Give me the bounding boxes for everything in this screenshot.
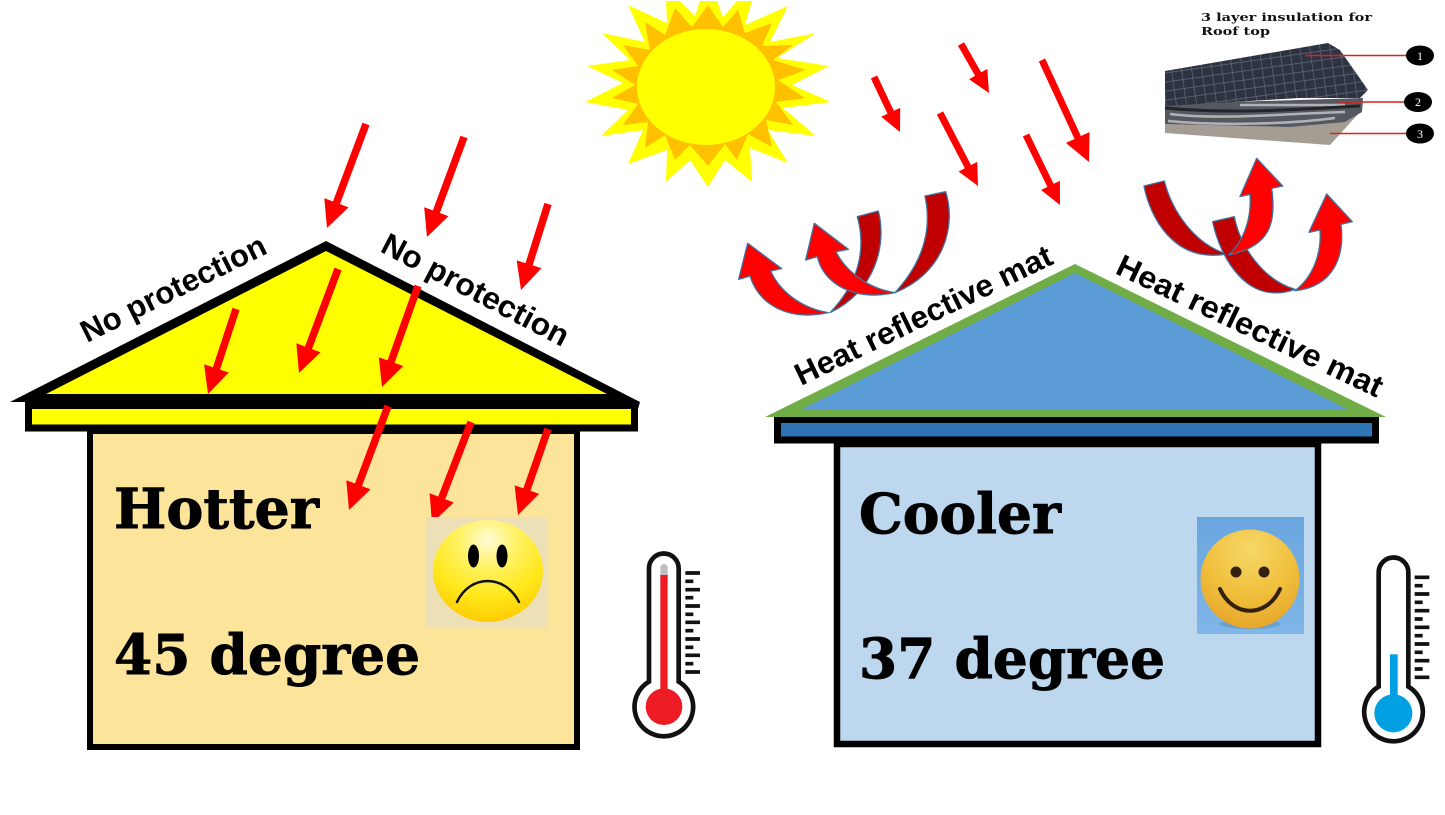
number badges [1406,46,1434,66]
insulation sample with numbered layers: 1 [1417,49,1423,63]
label: heat reflective mat right: Heat reflective mat [1111,248,1389,404]
insulation sample with numbered layers: 3 [1417,127,1423,141]
middle layer [1165,98,1363,127]
leader lines [1305,56,1407,134]
heading: 45 degree: 45 degree [114,622,420,687]
icon: sun [585,1,831,187]
reflected curved arrows: right pair [1144,158,1352,293]
icon: cool thermometer [1364,558,1429,741]
roof: heat reflective mat [765,264,1386,417]
red heat arrows: left house [208,124,548,523]
icon: hot thermometer [634,554,700,736]
reflected curved arrows: left pair [739,192,949,315]
label: no protection right: No protection [376,226,575,353]
right house [765,264,1386,744]
icon: sad face [426,517,548,628]
heading: 37 degree: 37 degree [859,626,1165,691]
red heat arrows: right house [874,44,1089,205]
caption: Roof top [1201,24,1270,38]
caption: 3 layer insulation for [1201,10,1373,24]
roof: no protection [10,241,640,409]
roof blue interior [800,273,1349,410]
eave: left [28,405,634,428]
wall: cool room [837,444,1318,744]
bottom layer [1165,112,1360,145]
top mesh layer [1165,43,1368,106]
label: heat reflective mat left: Heat reflective mat [789,238,1058,392]
insulation sample with numbered layers [1165,10,1434,145]
roof yellow interior [46,251,607,394]
wall: hot room [90,431,577,747]
left house [10,241,640,747]
heading: Cooler: Cooler [859,481,1062,546]
eave: right [778,420,1376,440]
label: no protection left: No protection [75,228,272,349]
insulation sample with numbered layers: 2 [1415,95,1421,109]
icon: happy face [1197,517,1304,634]
heading: Hotter: Hotter [114,476,320,541]
